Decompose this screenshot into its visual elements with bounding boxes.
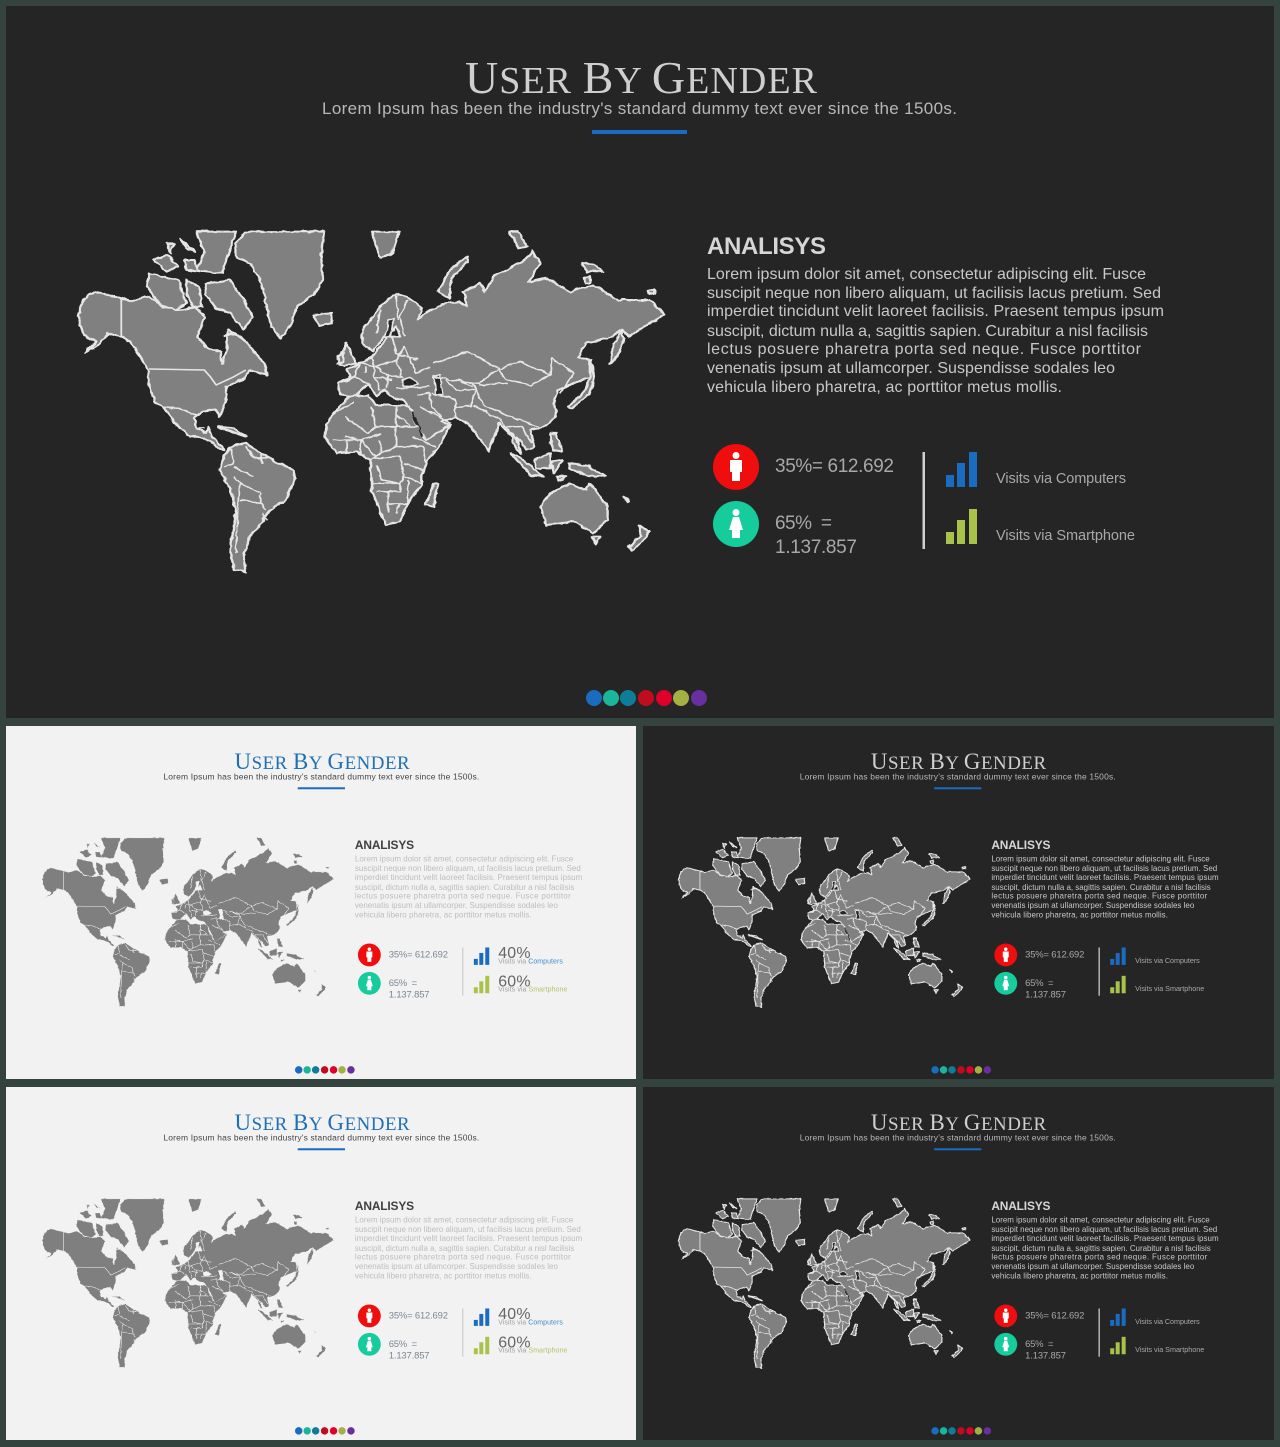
text block: analysis body: vehicula libero pharetra, ac porttitor metus mollis. bbox=[355, 911, 532, 920]
divider bbox=[1099, 947, 1100, 996]
subtitle: Lorem Ipsum has been the industry's standard dummy text ever since the 1500s. bbox=[800, 1132, 1116, 1142]
text block: analysis body: vehicula libero pharetra, ac porttitor metus mollis. bbox=[707, 379, 1062, 396]
title underline bbox=[934, 787, 981, 789]
icon: male bbox=[994, 1304, 1017, 1327]
icon: blue bars bbox=[474, 947, 489, 965]
title: USER BY GENDER bbox=[871, 749, 1046, 774]
text block: analysis body bbox=[355, 1215, 583, 1281]
text block: analysis body: lectus posuere pharetra porta sed neque. Fusce porttitor bbox=[707, 341, 1142, 358]
colour dots bbox=[586, 690, 707, 706]
title underline bbox=[934, 1148, 981, 1150]
stat: female count: 1.137.857 bbox=[775, 537, 857, 558]
panel: light slide bottom bbox=[6, 1087, 636, 1440]
text block: analysis body: suscipit neque non libero aliquam, ut facilisis lacus pretium. Sed bbox=[355, 864, 581, 873]
text block: analysis body: imperdiet tincidunt velit laoreet facilisis. Praesent tempus ipsum bbox=[355, 873, 583, 882]
panel: light slide top bbox=[6, 726, 636, 1079]
heading: analysis: ANALISYS bbox=[355, 838, 414, 852]
legend: smartphone: Visits via Smartphone bbox=[498, 1348, 567, 1355]
legend: smartphone: Visits via Smartphone bbox=[1135, 1345, 1204, 1354]
heading: analysis: ANALISYS bbox=[991, 838, 1051, 852]
legend: computers: Visits via Computers bbox=[498, 1319, 563, 1326]
legend: smartphone: Visits via Smartphone bbox=[996, 528, 1135, 544]
text block: analysis body: suscipit, dictum nulla a, sagittis sapien. Curabitur a nisl facilisis bbox=[355, 1244, 574, 1253]
text block: analysis body: venenatis ipsum at ullamcorper. Suspendisse sodales leo bbox=[991, 1262, 1195, 1271]
world map bbox=[678, 1199, 970, 1368]
panel: main dark slide bbox=[6, 6, 1274, 718]
legend: computers: Visits via Computers bbox=[498, 958, 563, 965]
text block: analysis body: venenatis ipsum at ullamcorper. Suspendisse sodales leo bbox=[707, 360, 1115, 377]
legend: computers: Visits via Computers bbox=[1135, 956, 1200, 965]
text block: analysis body: imperdiet tincidunt velit laoreet facilisis. Praesent tempus ipsum bbox=[355, 1234, 583, 1243]
colour dots bbox=[295, 1427, 355, 1435]
title underline bbox=[298, 1148, 345, 1150]
icon: green bars bbox=[474, 1337, 489, 1354]
stat: male count: 35%= 612.692 bbox=[389, 1310, 448, 1321]
text block: analysis body bbox=[991, 854, 1219, 920]
title: USER BY GENDER bbox=[871, 1110, 1046, 1135]
colour dots bbox=[931, 1066, 991, 1074]
subtitle: Lorem Ipsum has been the industry's standard dummy text ever since the 1500s. bbox=[322, 99, 957, 118]
stat: 40 percent: 40% bbox=[498, 945, 531, 962]
stat: male count: 35%= 612.692 bbox=[775, 456, 894, 477]
text block: analysis body: suscipit neque non libero aliquam, ut facilisis lacus pretium. Sed bbox=[707, 285, 1161, 302]
colour dots bbox=[295, 1066, 355, 1074]
text block: analysis body: Lorem ipsum dolor sit amet, consectetur adipiscing elit. Fusce bbox=[707, 266, 1146, 283]
text block: analysis body: suscipit, dictum nulla a, sagittis sapien. Curabitur a nisl facilisis bbox=[355, 883, 574, 892]
text block: analysis body: venenatis ipsum at ullamcorper. Suspendisse sodales leo bbox=[991, 901, 1195, 910]
world map bbox=[78, 232, 665, 572]
stat: male count: 35%= 612.692 bbox=[389, 949, 448, 960]
text block: analysis body: vehicula libero pharetra, ac porttitor metus mollis. bbox=[991, 911, 1168, 920]
colour dots bbox=[931, 1427, 991, 1435]
divider bbox=[922, 452, 925, 549]
title: USER BY GENDER bbox=[465, 52, 818, 103]
text block: analysis body: suscipit, dictum nulla a, sagittis sapien. Curabitur a nisl facilisis bbox=[707, 323, 1148, 340]
text block: analysis body: suscipit neque non libero aliquam, ut facilisis lacus pretium. Sed bbox=[991, 864, 1217, 873]
text block: analysis body: imperdiet tincidunt velit laoreet facilisis. Praesent tempus ipsum bbox=[707, 303, 1164, 320]
text block: analysis body: imperdiet tincidunt velit laoreet facilisis. Praesent tempus ipsum bbox=[991, 873, 1219, 882]
icon: male bbox=[994, 943, 1017, 966]
text block: analysis body: lectus posuere pharetra porta sed neque. Fusce porttitor bbox=[991, 1253, 1208, 1262]
stat: female count: 1.137.857 bbox=[1025, 990, 1066, 1001]
icon: blue bars bbox=[1110, 1308, 1126, 1326]
text block: analysis body: lectus posuere pharetra porta sed neque. Fusce porttitor bbox=[355, 892, 571, 901]
stat: male count: 35%= 612.692 bbox=[1025, 949, 1084, 960]
heading: analysis: ANALISYS bbox=[707, 233, 826, 260]
subtitle: Lorem Ipsum has been the industry's standard dummy text ever since the 1500s. bbox=[163, 1132, 479, 1142]
world map bbox=[42, 1199, 334, 1368]
icon: female bbox=[358, 1333, 381, 1356]
text block: analysis body: suscipit, dictum nulla a, sagittis sapien. Curabitur a nisl facilisis bbox=[991, 883, 1211, 892]
divider bbox=[462, 1308, 463, 1357]
world map bbox=[42, 838, 334, 1007]
text block: analysis body bbox=[355, 854, 583, 920]
legend: smartphone: Visits via Smartphone bbox=[1135, 984, 1204, 993]
text block: analysis body: venenatis ipsum at ullamcorper. Suspendisse sodales leo bbox=[355, 901, 558, 910]
text block: analysis body: venenatis ipsum at ullamcorper. Suspendisse sodales leo bbox=[355, 1262, 558, 1271]
stat: 40 percent: 40% bbox=[498, 1306, 531, 1323]
stat: female count bbox=[775, 513, 857, 558]
text block: analysis body: Lorem ipsum dolor sit amet, consectetur adipiscing elit. Fusce bbox=[991, 1215, 1210, 1224]
icon: blue bars bbox=[1110, 947, 1126, 965]
icon: green bars bbox=[474, 976, 489, 993]
text block: analysis body: vehicula libero pharetra, ac porttitor metus mollis. bbox=[355, 1272, 532, 1281]
text block: analysis body: Lorem ipsum dolor sit amet, consectetur adipiscing elit. Fusce bbox=[991, 854, 1210, 863]
panel: dark slide top bbox=[643, 726, 1274, 1079]
title: USER BY GENDER bbox=[235, 749, 410, 774]
icon: blue bars bbox=[474, 1308, 489, 1326]
stat: female count bbox=[389, 1339, 430, 1362]
icon: green bars bbox=[946, 509, 977, 544]
text block: analysis body: suscipit neque non libero aliquam, ut facilisis lacus pretium. Sed bbox=[991, 1225, 1217, 1234]
heading: analysis: ANALISYS bbox=[355, 1199, 414, 1213]
subtitle: Lorem Ipsum has been the industry's standard dummy text ever since the 1500s. bbox=[163, 771, 479, 781]
text block: analysis body: Lorem ipsum dolor sit amet, consectetur adipiscing elit. Fusce bbox=[355, 1215, 574, 1224]
text block: analysis body: lectus posuere pharetra porta sed neque. Fusce porttitor bbox=[991, 892, 1208, 901]
icon: green bars bbox=[1110, 976, 1126, 993]
stat: female count: 65% = bbox=[775, 513, 832, 534]
text block: analysis body: suscipit neque non libero aliquam, ut facilisis lacus pretium. Sed bbox=[355, 1225, 581, 1234]
divider bbox=[462, 947, 463, 996]
icon: female bbox=[994, 972, 1017, 995]
stat: female count: 65% = bbox=[1025, 978, 1054, 989]
divider bbox=[1099, 1308, 1100, 1357]
stat: female count: 1.137.857 bbox=[1025, 1351, 1066, 1362]
title underline bbox=[298, 787, 345, 789]
text block: analysis body: vehicula libero pharetra, ac porttitor metus mollis. bbox=[991, 1272, 1168, 1281]
world map bbox=[678, 838, 970, 1007]
title underline bbox=[592, 130, 687, 134]
stat: 60 percent: 60% bbox=[498, 1334, 531, 1351]
legend: smartphone: Visits via Smartphone bbox=[498, 987, 567, 994]
stat: female count bbox=[1025, 978, 1066, 1001]
icon: male bbox=[713, 444, 759, 490]
stat: 60 percent: 60% bbox=[498, 973, 531, 990]
text block: analysis body: lectus posuere pharetra porta sed neque. Fusce porttitor bbox=[355, 1253, 571, 1262]
icon: female bbox=[713, 501, 759, 547]
stat: female count: 1.137.857 bbox=[389, 990, 430, 1001]
icon: female bbox=[994, 1333, 1017, 1356]
text block: analysis body: Lorem ipsum dolor sit amet, consectetur adipiscing elit. Fusce bbox=[355, 854, 574, 863]
text block: analysis body: imperdiet tincidunt velit laoreet facilisis. Praesent tempus ipsum bbox=[991, 1234, 1219, 1243]
title: USER BY GENDER bbox=[235, 1110, 410, 1135]
icon: female bbox=[358, 972, 381, 995]
text block: analysis body bbox=[991, 1215, 1219, 1281]
icon: blue bars bbox=[946, 452, 977, 487]
legend: computers: Visits via Computers bbox=[996, 471, 1126, 487]
subtitle: Lorem Ipsum has been the industry's standard dummy text ever since the 1500s. bbox=[800, 771, 1116, 781]
stat: male count: 35%= 612.692 bbox=[1025, 1310, 1084, 1321]
icon: male bbox=[358, 943, 381, 966]
heading: analysis: ANALISYS bbox=[991, 1199, 1051, 1213]
stat: female count: 65% = bbox=[1025, 1339, 1054, 1350]
stat: female count: 1.137.857 bbox=[389, 1351, 430, 1362]
text block: analysis body: suscipit, dictum nulla a, sagittis sapien. Curabitur a nisl facilisis bbox=[991, 1244, 1211, 1253]
icon: male bbox=[358, 1304, 381, 1327]
text block: analysis body bbox=[707, 266, 1164, 396]
stat: female count bbox=[1025, 1339, 1066, 1362]
icon: green bars bbox=[1110, 1337, 1126, 1354]
legend: computers: Visits via Computers bbox=[1135, 1317, 1200, 1326]
stat: female count bbox=[389, 978, 430, 1001]
stat: female count: 65% = bbox=[389, 1339, 418, 1350]
panel: dark slide bottom bbox=[643, 1087, 1274, 1440]
stat: female count: 65% = bbox=[389, 978, 418, 989]
